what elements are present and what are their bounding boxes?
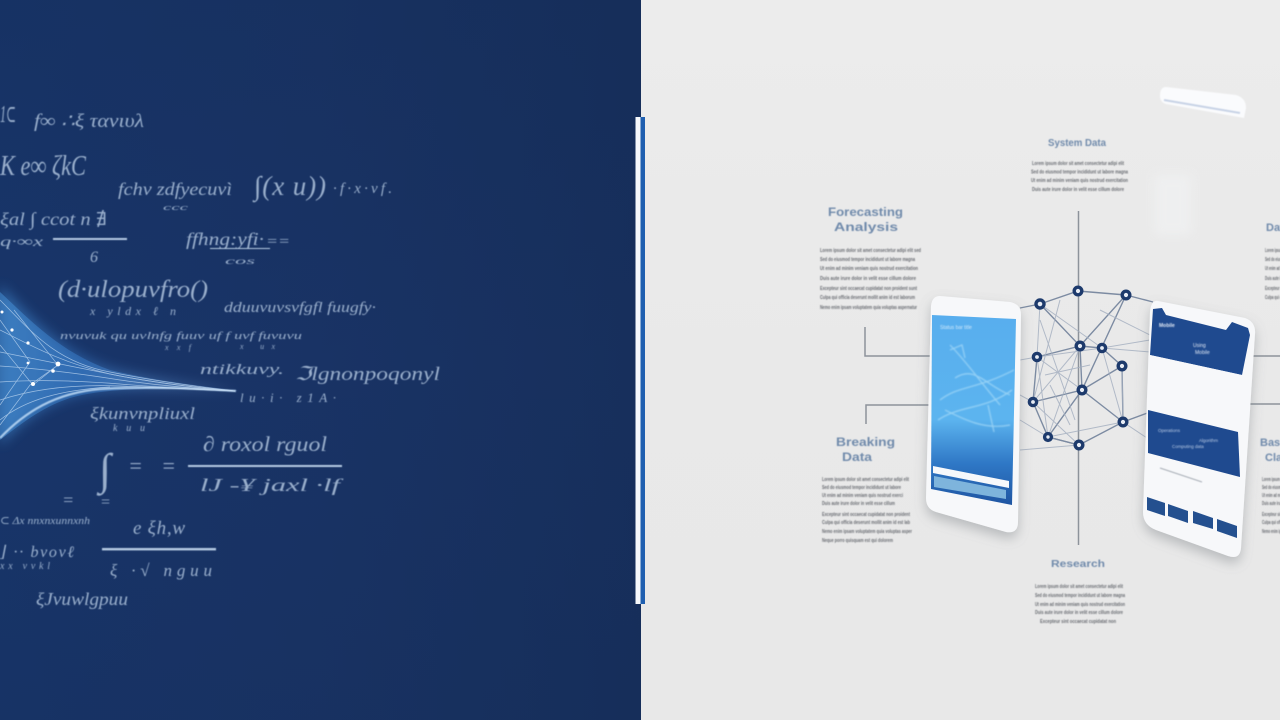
text block: left upper (820, 205, 921, 311)
text block: top (1031, 138, 1128, 193)
text block: bottom: Excepteur sint occaecat cupidatat non (1040, 619, 1116, 625)
lower fraction formula: ⌋ ·· bvovℓ (0, 544, 74, 561)
network nodes (1029, 287, 1130, 449)
lower fraction formula: ξ ·√ nguu (110, 561, 212, 580)
formula line group 2: 6 (90, 249, 98, 266)
text block: left lower: Duis aute irure dolor in velit esse cillum (822, 501, 895, 507)
formula line group 3: x yldx ℓ n (89, 304, 176, 318)
formula line group 3: x ux (239, 342, 275, 351)
screen wave pattern (938, 345, 1014, 432)
formula line group 1: K e∞ ζkC (0, 151, 86, 182)
panel: dark navy mathematics background (0, 0, 641, 720)
text block: left upper: Sed do eiusmod tempor incididunt ut labore magna (820, 257, 915, 263)
formula line group 3 (58, 277, 376, 352)
formula line group 1: fchv zdfyecuvì (118, 179, 232, 199)
header title: Using (1193, 343, 1206, 349)
text block: bottom (1035, 559, 1125, 625)
integral fraction formula: lJ -¥ jaxl ·lf (200, 475, 345, 495)
status bar text: Status bar title (940, 325, 972, 331)
formula line group 3: nvuvuk qu uvlnfg fuuv uf f uvf fuvuvu (60, 330, 303, 342)
mathematical formulas (0, 102, 440, 609)
lower fraction formula (0, 515, 216, 609)
formula line group 3: (d·ulopuvfro() (58, 277, 208, 303)
text block: left upper: Lorem ipsum dolor sit amet consectetur adipi elit sed (820, 248, 921, 254)
phone: right (1143, 301, 1255, 557)
text block: left upper: Ut enim ad minim veniam quis nostrud exercitation (820, 266, 918, 272)
integral fraction formula: ∂ roxol rguol (203, 432, 327, 456)
phone body right (1143, 301, 1255, 557)
formula line group 3: xxf (164, 343, 193, 352)
phone header blue (1150, 308, 1250, 375)
formula line group 2: == (266, 234, 290, 250)
header title: Mobile (1159, 323, 1175, 329)
formula line group 1: ·f·x·vf. (333, 181, 392, 197)
formula line group 4: ntikkuvy. (200, 362, 284, 378)
neural flow funnel (0, 285, 238, 445)
header title: Mobile (1195, 350, 1210, 356)
formula line group 2 (0, 209, 290, 266)
formula line group 2: q·∞x (0, 235, 44, 250)
band text: Algorithm (1199, 438, 1218, 443)
tiles (1147, 497, 1237, 538)
formula line group 1 (0, 102, 392, 212)
lower fraction formula: xx vvkl (0, 561, 50, 572)
formula line group 2: cos (225, 256, 256, 266)
text block: left upper: Analysis (834, 220, 898, 234)
text block: left lower: Breaking (836, 435, 895, 449)
panel: light grey background (641, 0, 1280, 720)
formula line group 3: dduuvuvsvfgfl fuugfy· (224, 300, 376, 316)
network graph (1020, 287, 1153, 450)
formula line group 4 (90, 362, 440, 434)
formula line group 4: ℑlgnonpoqonyl (295, 364, 440, 385)
lower fraction formula: ⊂ Δx nnxnxunnxnh (0, 515, 91, 527)
phone body left (926, 296, 1021, 532)
text block: left lower: Neque porro quisquam est qui dolorem (822, 538, 893, 544)
list row (1160, 468, 1202, 482)
band text (1158, 428, 1218, 449)
formula line group 4: lu·i· z1A· (240, 390, 336, 405)
integral fraction formula (62, 432, 345, 511)
faint ghost element (1155, 175, 1191, 235)
text block: top: Duis aute irure dolor in velit esse cillum dolore (1032, 187, 1124, 193)
formula line group 1: ccc (163, 203, 189, 212)
formula line group 4: kuu (113, 423, 145, 434)
text block: right upper clipped (1265, 222, 1280, 301)
header title (1159, 323, 1210, 356)
text block: bottom: Duis aute irure dolor in velit esse cillum dolore (1035, 610, 1123, 616)
lower fraction formula: ξJvuwlgpuu (36, 589, 128, 609)
integral fraction formula: ∫ (96, 445, 114, 496)
text block: left upper: Duis aute irure dolor in velit esse cillum dolore (820, 276, 916, 282)
band text: Operations (1158, 428, 1181, 433)
text block: top: Sed do eiusmod tempor incididunt ut labore magna (1031, 170, 1128, 176)
phone screen left (931, 315, 1016, 505)
text block: left lower: Sed do eiusmod tempor incididunt ut labore (822, 485, 901, 491)
text block: top: Ut enim ad minim veniam quis nostrud exercitation (1031, 178, 1128, 184)
text block: bottom: Research (1051, 559, 1105, 570)
text block: left upper: Forecasting (828, 205, 903, 219)
text block: right lower clipped (1260, 437, 1280, 535)
text block: bottom: Ut enim ad minim veniam quis nostrud exercitation (1035, 602, 1125, 608)
login button (934, 476, 1006, 499)
formula line group 1: f∞ ∴ξ τανιυλ (34, 111, 144, 132)
integral fraction formula: = (100, 494, 111, 511)
formula line group 1: 1⊂ (0, 102, 16, 128)
formula line group 2: ffhng:yfi· (186, 229, 264, 249)
text block: left lower: Lorem ipsum dolor sit amet consectetur adipi elit (822, 477, 909, 483)
text block: left lower (822, 435, 912, 544)
text block: left lower: Culpa qui officia deserunt mollit anim id est lab (822, 520, 910, 526)
text block: left upper: Excepteur sint occaecat cupidatat non proident sunt (820, 286, 917, 292)
text block: top: System Data (1048, 138, 1106, 149)
text block: left upper: Nemo enim ipsam voluptatem quia voluptas aspernatur (820, 305, 917, 311)
formula line group 2: ξal ∫ ccot n ∄ (0, 209, 107, 230)
text block: left upper: Culpa qui officia deserunt mollit anim id est laborum (820, 295, 915, 301)
lower fraction formula: e ξh,w (133, 518, 185, 539)
text block: left lower: Data (842, 450, 872, 464)
leader lines (865, 211, 1280, 545)
integral fraction formula: = = (128, 453, 176, 478)
floating ghost card top right (1160, 87, 1246, 118)
integral fraction formula: = (62, 490, 74, 510)
formula line group 1: ∫(x u)) (252, 171, 326, 203)
blue lower band (1148, 410, 1240, 477)
white card (1148, 355, 1242, 432)
formula line group 4: ξkunvnpliuxl (90, 404, 195, 423)
login field (933, 466, 1009, 488)
phone: left (926, 296, 1021, 532)
text block: left lower: Ut enim ad minim veniam quis nostrud exerci (822, 493, 903, 499)
text block: left lower: Nemo enim ipsam voluptatem quia voluptas asper (822, 529, 912, 535)
text block: bottom: Lorem ipsum dolor sit amet consectetur adipi elit (1035, 584, 1123, 590)
text block: bottom: Sed do eiusmod tempor incididunt ut labore magna (1035, 593, 1125, 599)
vertical divider bar (636, 117, 645, 604)
band text: Computing data (1172, 444, 1204, 449)
text block: left lower: Excepteur sint occaecat cupidatat non proident (822, 512, 910, 518)
text block: top: Lorem ipsum dolor sit amet consectetur adipi elit (1032, 161, 1124, 167)
